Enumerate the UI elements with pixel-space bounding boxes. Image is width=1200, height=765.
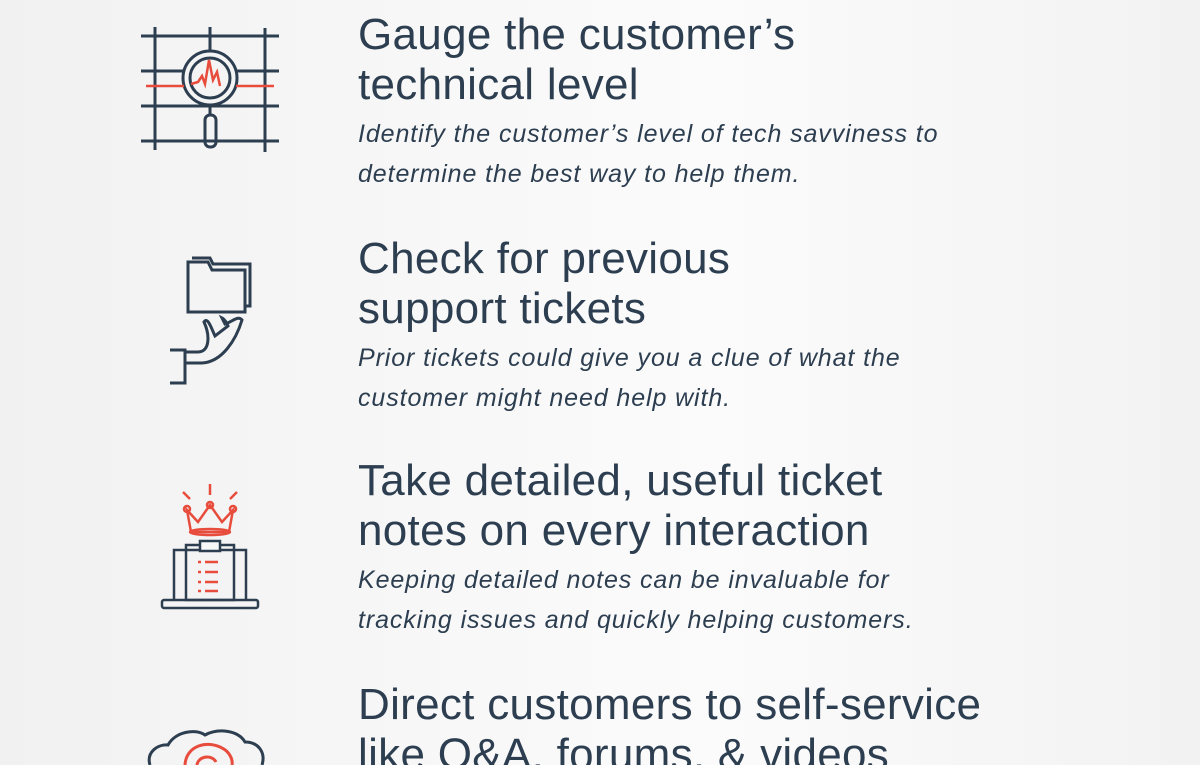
text 3: tracking issues and quickly helping customers. — [358, 606, 914, 634]
heading 4: Direct customers to self-service — [358, 680, 981, 729]
heading 2: support tickets — [358, 284, 646, 333]
heading 3: Take detailed, useful ticket — [358, 456, 882, 505]
text 1 — [358, 120, 938, 188]
heading 2: Check for previous — [358, 234, 730, 283]
heading 2 — [358, 234, 901, 412]
icon: crown and laptop clipboard — [160, 484, 260, 610]
icon: folder and hand — [170, 256, 252, 384]
heading 1: Gauge the customer’s — [358, 10, 795, 59]
icon: magnifier on grid — [141, 27, 279, 152]
text 2 — [358, 344, 901, 412]
text 2: Prior tickets could give you a clue of what the — [358, 344, 901, 372]
heading 3: notes on every interaction — [358, 506, 870, 555]
text 1: Identify the customer’s level of tech savviness to — [358, 120, 938, 148]
heading 4 — [358, 680, 981, 765]
text 2: customer might need help with. — [358, 384, 731, 412]
heading 3 — [358, 456, 914, 634]
text 3 — [358, 566, 914, 634]
text 3: Keeping detailed notes can be invaluable for — [358, 566, 890, 594]
heading 1: technical level — [358, 60, 639, 109]
heading 1 — [358, 10, 938, 188]
text 1: determine the best way to help them. — [358, 160, 800, 188]
icon: cloud — [148, 729, 265, 765]
